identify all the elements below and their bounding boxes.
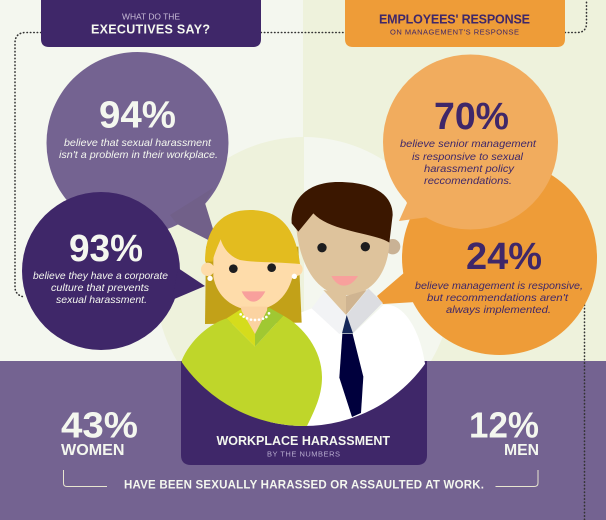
background circle bbox=[156, 137, 452, 433]
speech bubble: 24%: always implemented. bbox=[446, 304, 551, 316]
speech bubble: 24%: believe management is responsive, bbox=[415, 280, 583, 292]
statistic: men: MEN bbox=[504, 442, 539, 459]
header tab: employees: EMPLOYEES' RESPONSE bbox=[379, 13, 530, 27]
woman bbox=[182, 210, 322, 443]
speech bubble: 94%: isn't a problem in their workplace. bbox=[59, 149, 218, 161]
speech bubble: 94%: 94% bbox=[99, 95, 176, 137]
caption with brackets bbox=[64, 470, 538, 491]
center title panel: BY THE NUMBERS bbox=[267, 449, 340, 458]
speech bubble: 70%: is responsive to sexual bbox=[412, 151, 524, 163]
speech bubble: 70%: harassment policy bbox=[424, 163, 515, 175]
speech bubble: 70% bbox=[383, 54, 558, 230]
speech bubble: 70%: reccomendations. bbox=[424, 175, 512, 187]
header tab: employees: ON MANAGEMENT'S RESPONSE bbox=[390, 28, 519, 37]
speech bubble: 93%: 93% bbox=[69, 228, 143, 270]
speech bubble: 70%: 70% bbox=[434, 96, 509, 138]
header tab: executives: EXECUTIVES SAY? bbox=[91, 23, 210, 37]
illustration: man and woman bbox=[182, 182, 425, 426]
speech bubble: 24%: 24% bbox=[466, 236, 542, 278]
speech bubble: 93%: culture that prevents bbox=[51, 282, 150, 294]
speech bubble: 70%: believe senior management bbox=[400, 138, 537, 150]
speech bubble: 93% bbox=[22, 192, 205, 350]
header tab: executives: WHAT DO THE bbox=[122, 12, 180, 22]
speech bubble: 93%: believe they have a corporate bbox=[33, 270, 168, 282]
bottom panel background bbox=[0, 361, 606, 520]
man bbox=[270, 182, 425, 426]
center title panel: WORKPLACE HARASSMENT bbox=[216, 434, 390, 448]
statistic: women: WOMEN bbox=[61, 442, 124, 459]
speech bubble: 24% bbox=[377, 160, 597, 355]
statistic: women: 43% bbox=[61, 405, 138, 446]
speech bubble: 94%: believe that sexual harassment bbox=[64, 137, 212, 149]
header tab: executives bbox=[41, 0, 261, 47]
caption with brackets: HAVE BEEN SEXUALLY HARASSED OR ASSAULTED AT WORK. bbox=[124, 479, 484, 491]
speech bubble: 93%: sexual harassment. bbox=[56, 294, 147, 306]
speech bubble: 24%: but recommendations aren't bbox=[427, 292, 569, 304]
statistic: men: 12% bbox=[469, 405, 539, 446]
header tab: employees bbox=[345, 0, 565, 47]
speech bubble: 94% bbox=[46, 52, 228, 245]
center title panel bbox=[181, 361, 427, 465]
